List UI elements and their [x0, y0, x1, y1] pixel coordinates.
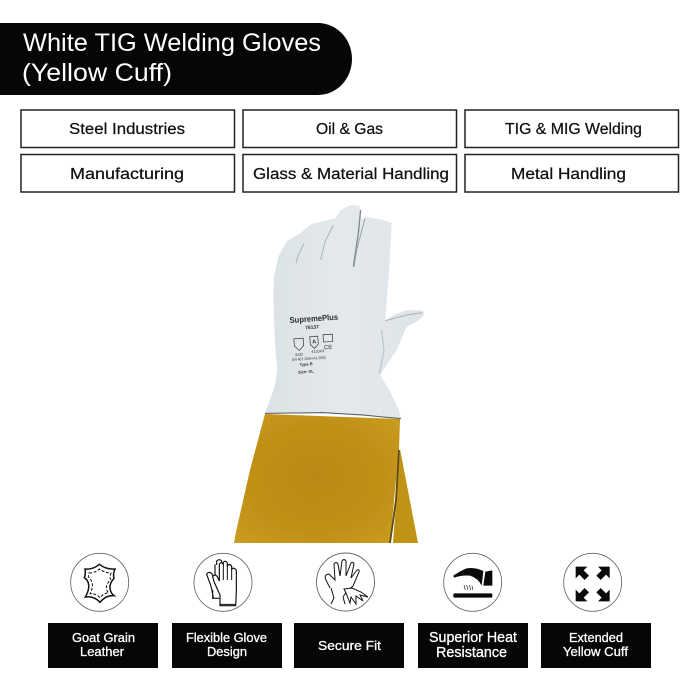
glove printed label: SupremePlus [289, 312, 339, 325]
glove printed label: Type B [300, 361, 313, 367]
icon: four expanding arrows [564, 553, 622, 611]
label: Extended Yellow Cuff: Yellow Cuff [563, 644, 628, 659]
label: Superior Heat Resistance: Superior Heat [429, 630, 517, 646]
feature: superior heat resistance [418, 553, 528, 668]
icon: hand over heat [444, 553, 502, 611]
tag: Oil & Gas [243, 110, 456, 148]
label: Flexible Glove Design: Flexible Glove [186, 630, 267, 645]
glove printed label: 76137 [305, 324, 319, 331]
label: Goat Grain Leather: Leather [80, 644, 125, 659]
icon: hand gripping wrist [316, 553, 374, 611]
feature: goat grain leather [48, 553, 158, 668]
glove printed label: 3232 [295, 353, 303, 357]
glove printed label: 4133XX [311, 349, 325, 354]
glove printed label: Size: XL [298, 368, 314, 375]
tag: Oil & Gas: Oil & Gas [316, 121, 383, 138]
tag: Manufacturing: Manufacturing [70, 166, 184, 183]
white leather glove [265, 205, 424, 419]
label: Goat Grain Leather: Goat Grain [72, 630, 135, 645]
tag: Glass & Material Handling [243, 154, 456, 192]
tag: Metal Handling [465, 154, 678, 192]
tag: Glass & Material Handling: Glass & Material Handling [253, 166, 449, 183]
icon: gloves [194, 553, 252, 611]
tag: Metal Handling: Metal Handling [511, 166, 626, 183]
glove printed label: CE [324, 345, 332, 351]
industry tags [21, 110, 678, 192]
label: Extended Yellow Cuff [541, 623, 651, 668]
tag: TIG & MIG Welding: TIG & MIG Welding [505, 121, 642, 138]
title banner: White TIG Welding Gloves [23, 29, 321, 57]
label: Flexible Glove Design [172, 623, 282, 668]
feature: secure fit [294, 553, 404, 668]
icon: leather hide [71, 553, 129, 611]
glove printed label: EN 407:2004+A1:2005 [292, 356, 326, 362]
tag: Steel Industries: Steel Industries [69, 121, 185, 138]
title banner [0, 23, 352, 95]
label: Secure Fit: Secure Fit [318, 638, 381, 653]
label: Extended Yellow Cuff: Extended [569, 630, 623, 645]
yellow suede cuff [234, 414, 418, 543]
tag: Manufacturing [21, 154, 234, 192]
feature: flexible glove design [172, 553, 282, 668]
glove photo [234, 205, 424, 543]
label: Flexible Glove Design: Design [207, 644, 247, 659]
glove printed label: A [312, 339, 316, 346]
label: Superior Heat Resistance: Resistance [436, 645, 507, 661]
label: Goat Grain Leather [48, 623, 158, 668]
glove printed label [289, 312, 342, 375]
label: Superior Heat Resistance [418, 623, 528, 668]
title banner: (Yellow Cuff) [22, 59, 172, 87]
tag: TIG & MIG Welding [465, 110, 678, 148]
feature: extended yellow cuff [541, 553, 651, 668]
tag: Steel Industries [21, 110, 234, 148]
